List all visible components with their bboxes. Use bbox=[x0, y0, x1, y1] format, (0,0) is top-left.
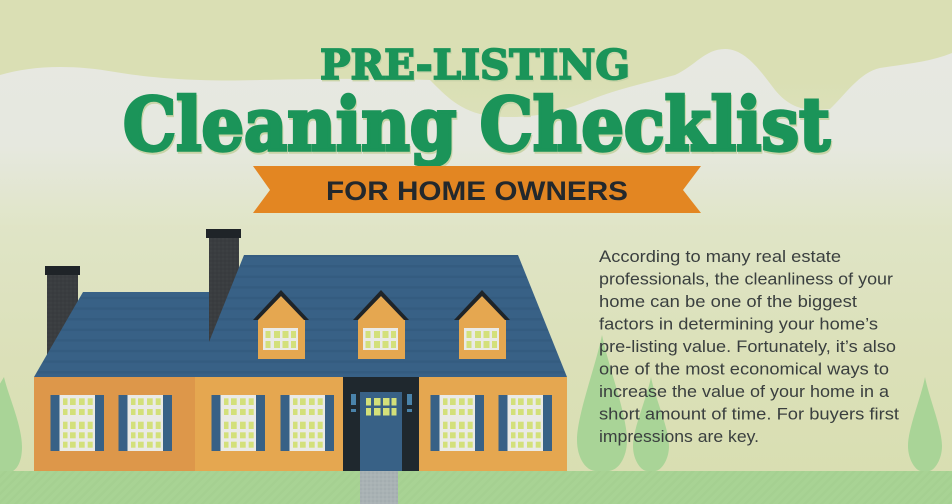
tree: far left bbox=[0, 377, 22, 471]
tree: small right of house bbox=[633, 377, 669, 471]
intro paragraph: impressions are key. bbox=[599, 428, 759, 446]
wall left section bbox=[34, 377, 195, 471]
upper roof bbox=[195, 255, 567, 377]
window 3 bbox=[212, 395, 265, 451]
tree: tall right of house bbox=[577, 335, 627, 471]
intro paragraph: increase the value of your home in a bbox=[599, 383, 890, 401]
intro paragraph: According to many real estate bbox=[599, 248, 841, 266]
house bbox=[34, 229, 567, 471]
tree: far right bbox=[908, 377, 942, 471]
intro paragraph: factors in determining your home’s bbox=[599, 316, 878, 334]
ground bbox=[0, 471, 952, 504]
dormer 1 bbox=[253, 290, 309, 359]
window 5 bbox=[430, 395, 484, 451]
wall right section bbox=[195, 377, 567, 471]
banner text: FOR HOME OWNERS bbox=[326, 176, 628, 206]
lower roof left bbox=[34, 292, 300, 377]
chimney left bbox=[45, 266, 80, 360]
window 1 bbox=[50, 395, 104, 451]
stone walkway bbox=[360, 471, 398, 504]
ribbon banner bbox=[253, 166, 701, 213]
intro paragraph: professionals, the cleanliness of your bbox=[599, 270, 894, 288]
title: cleaning checklist: Cleaning Checklist bbox=[124, 84, 831, 170]
intro paragraph: home can be one of the biggest bbox=[599, 293, 857, 311]
dormer 2 bbox=[353, 290, 409, 359]
intro paragraph: pre-listing value. Fortunately, it’s also bbox=[599, 338, 896, 356]
title: cleaning checklist: Cleaning Checklist bbox=[123, 82, 830, 168]
intro paragraph: one of the most economical ways to bbox=[599, 360, 889, 378]
window 4 bbox=[280, 395, 334, 451]
front door bbox=[343, 377, 419, 471]
title: pre-listing: PRE-LISTING bbox=[321, 42, 631, 90]
window 2 bbox=[118, 395, 172, 451]
dormer 3 bbox=[454, 290, 510, 359]
chimney right bbox=[206, 229, 241, 342]
intro paragraph bbox=[599, 248, 899, 446]
intro paragraph: short amount of time. For buyers first bbox=[599, 406, 899, 424]
window 6 bbox=[498, 395, 552, 451]
background hills bbox=[0, 49, 952, 225]
title: pre-listing: PRE-LISTING bbox=[320, 41, 630, 89]
